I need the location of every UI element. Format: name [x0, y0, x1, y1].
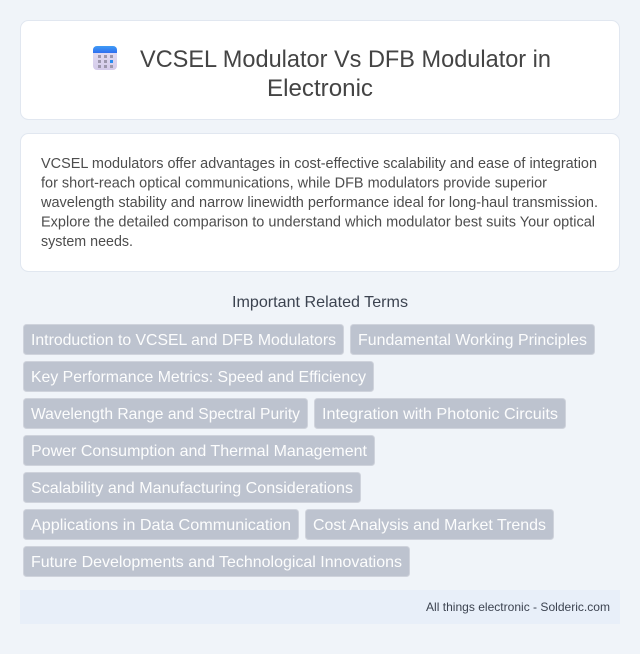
- tag list: [24, 324, 594, 576]
- tag: Introduction to VCSEL and DFB Modulators: [31, 332, 336, 349]
- tag: Future Developments and Technological Innovations: [31, 554, 402, 571]
- tag: [350, 324, 594, 354]
- summary text: Explore the detailed comparison to understand which modulator best suits Your optical: [41, 214, 595, 230]
- tag: Wavelength Range and Spectral Purity: [31, 406, 300, 423]
- tag: [24, 546, 410, 576]
- tag: [24, 436, 374, 466]
- summary text: wavelength stability and narrow linewidth performance ideal for long-haul transmission.: [40, 195, 598, 211]
- tag: [314, 398, 566, 428]
- footer bar: [20, 590, 620, 624]
- tag: [24, 472, 360, 502]
- tag: Integration with Photonic Circuits: [322, 406, 558, 423]
- summary panel: [20, 134, 620, 272]
- summary text: system needs.: [41, 234, 133, 250]
- tag: Key Performance Metrics: Speed and Efficiency: [31, 369, 366, 386]
- summary text: [40, 156, 598, 250]
- summary text: VCSEL modulators offer advantages in cost-effective scalability and ease of integration: [41, 156, 597, 172]
- tag: Scalability and Manufacturing Considerations: [31, 480, 353, 497]
- title: [140, 46, 551, 102]
- header panel: [20, 20, 620, 120]
- tag: Cost Analysis and Market Trends: [313, 517, 546, 534]
- tag: [24, 362, 374, 392]
- tag: [306, 510, 554, 540]
- tag: [24, 398, 308, 428]
- title: VCSEL Modulator Vs DFB Modulator in: [140, 46, 551, 73]
- tag: Power Consumption and Thermal Management: [31, 443, 368, 460]
- tag: [24, 324, 344, 354]
- tag: [24, 510, 298, 540]
- icon: calendar: [93, 46, 117, 70]
- title: Electronic: [267, 75, 373, 102]
- heading: important related terms: Important Related Terms: [232, 294, 408, 311]
- footer text: All things electronic - Solderic.com: [426, 600, 610, 614]
- tag: Fundamental Working Principles: [358, 332, 587, 349]
- tag: Applications in Data Communication: [31, 517, 291, 534]
- summary text: for short-reach optical communications, while DFB modulators provide superior: [41, 176, 547, 192]
